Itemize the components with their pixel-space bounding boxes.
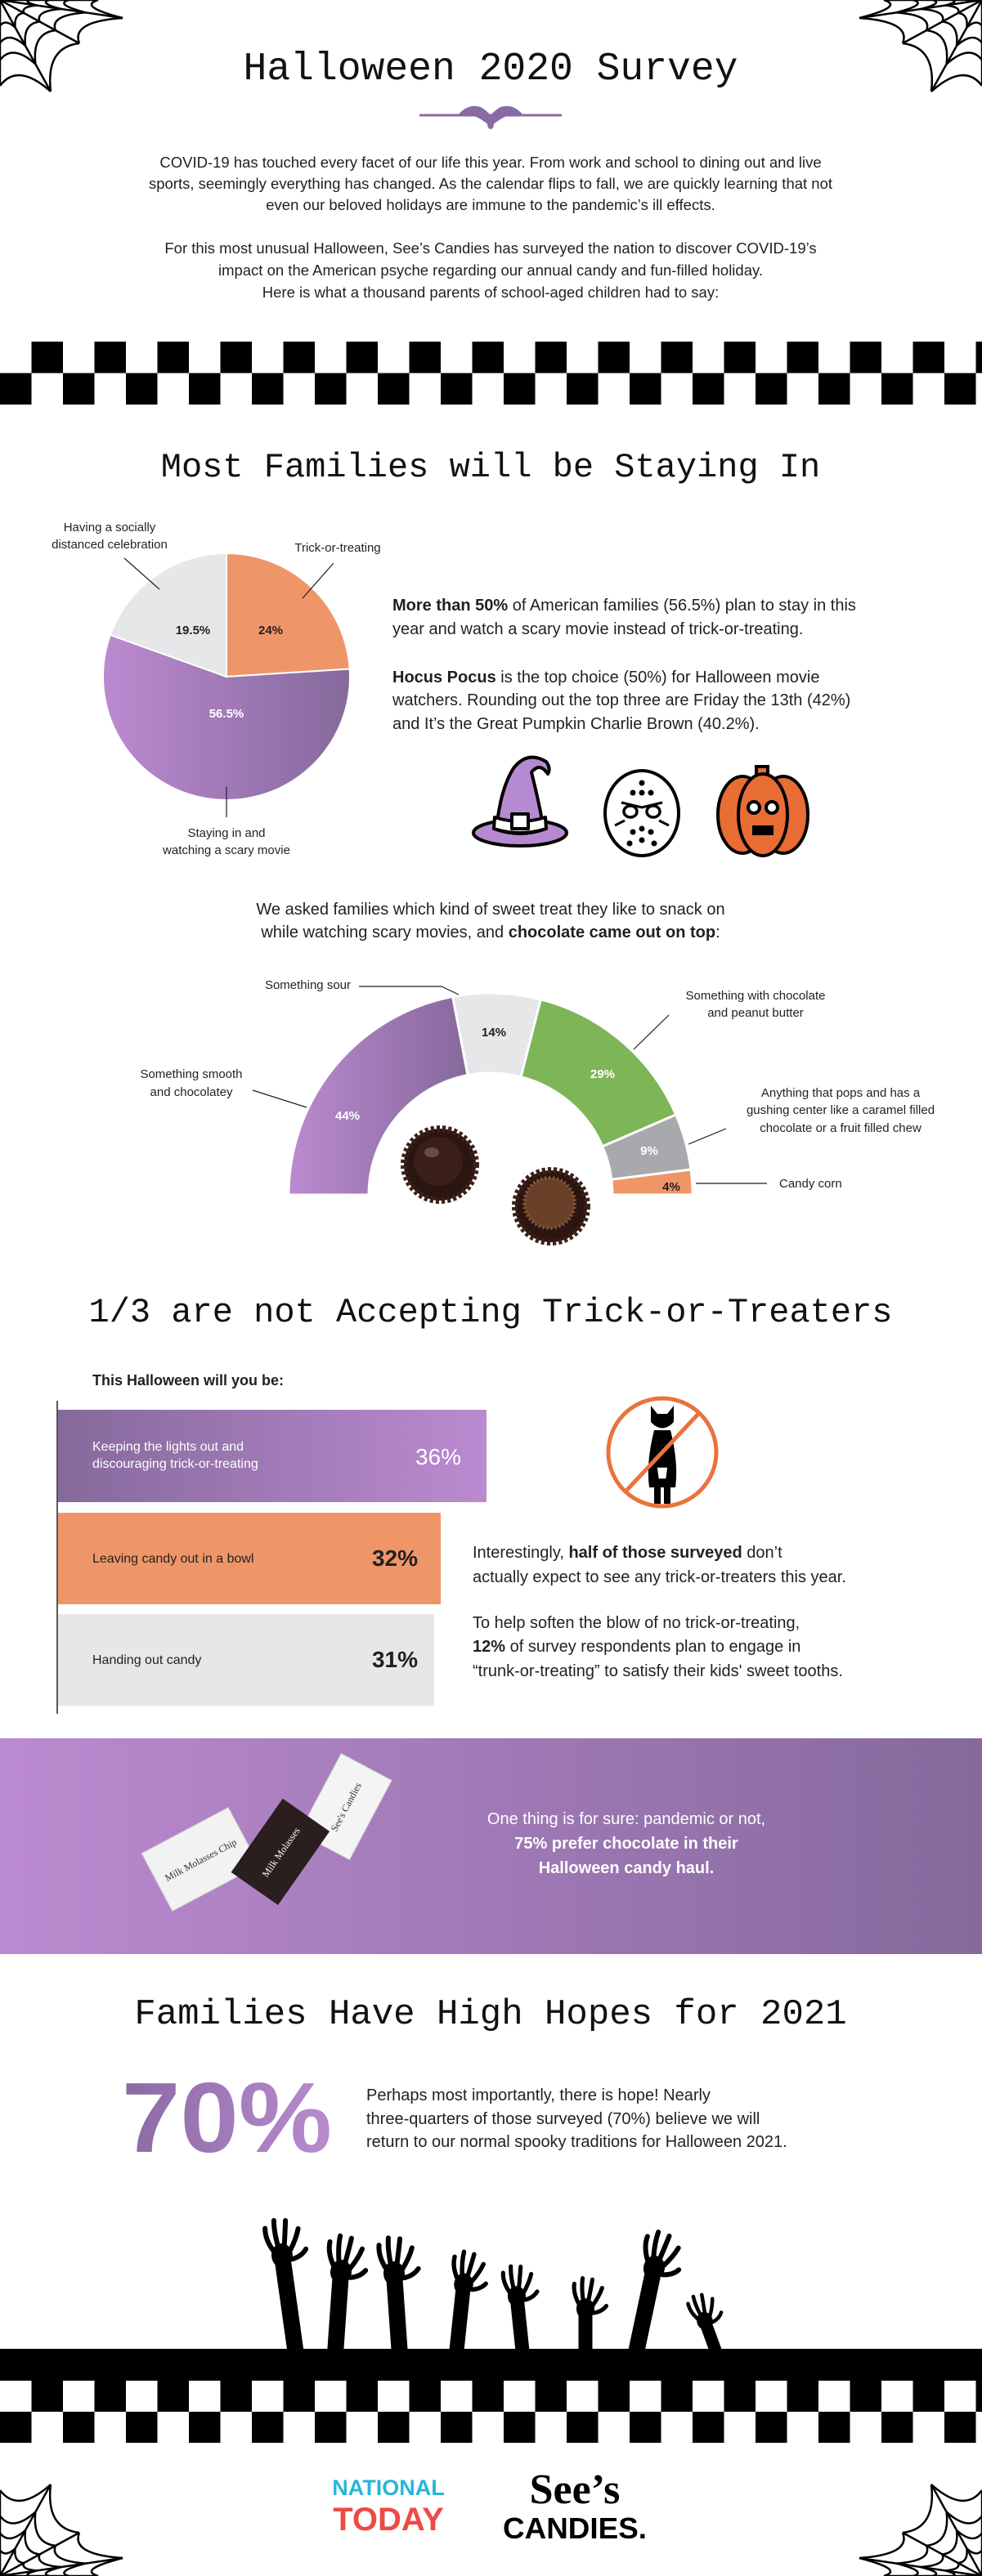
intro paragraph 2 [164, 239, 817, 301]
donut chart: sweet treats: Something sour [265, 978, 351, 992]
text: staying in stats: year and watch a scary movie instead of trick-or-treating. [392, 620, 803, 638]
banner: 75% prefer chocolate: One thing is for sure: pandemic or not, [487, 1810, 765, 1828]
pie chart: Having a socially [64, 521, 156, 534]
zombie hands [262, 2218, 723, 2349]
text: hope for 2021 [366, 2086, 787, 2151]
donut chart: sweet treats: Anything that pops and has a [761, 1086, 921, 1100]
bar: handing out 31%: Handing out candy [92, 1653, 201, 1667]
text: staying in stats: and It’s the Great Pumpkin Charlie Brown (40.2%). [392, 715, 760, 733]
text: trick-or-treat expectations [473, 1544, 846, 1680]
donut chart: sweet treats: 4% [662, 1180, 680, 1194]
bar: candy bowl 32%: Leaving candy out in a bowl [92, 1552, 253, 1566]
text: hope for 2021: three-quarters of those surveyed (70%) believe we will [366, 2110, 760, 2128]
intro paragraph 2: For this most unusual Halloween, See’s Candies has surveyed the nation to discover COVID-19’s [164, 239, 817, 257]
pie chart [52, 521, 381, 857]
pie chart: 56.5% [209, 707, 244, 721]
bar: candy bowl 32%: 32% [372, 1545, 418, 1571]
bar chart: this Halloween will you be [57, 1372, 487, 1714]
intro paragraph 1: even our beloved holidays are immune to the pandemic’s ill effects. [266, 196, 715, 213]
candy wrappers [141, 1754, 392, 1911]
text: trick-or-treat expectations: 12% of survey respondents plan to engage in [473, 1638, 800, 1656]
text: trick-or-treat expectations: “trunk-or-treating” to satisfy their kids' sweet tooths. [473, 1662, 843, 1680]
text: hope for 2021: Perhaps most importantly, there is hope! Nearly [366, 2086, 711, 2104]
cobweb top-left [0, 0, 123, 92]
text: sweet treat intro [256, 901, 725, 941]
bar: lights out 36%: Keeping the lights out and [92, 1440, 244, 1454]
text: staying in stats: Hocus Pocus is the top choice (50%) for Halloween movie [392, 669, 819, 686]
logo: National Today [332, 2475, 445, 2538]
heading: Families Have High Hopes for 2021: Families Have High Hopes for 2021 [134, 1994, 847, 2035]
pie chart: 19.5% [176, 624, 210, 637]
cobweb bottom-right [859, 2484, 982, 2576]
bar: handing out 31% [58, 1614, 434, 1706]
icon: witch hat [473, 758, 567, 846]
banner: 75% prefer chocolate [0, 1738, 982, 1954]
donut chart: sweet treats: and peanut butter [707, 1006, 804, 1020]
pie chart: Trick-or-treating [294, 541, 381, 555]
pie chart: Staying in and [187, 826, 266, 840]
intro paragraph 1 [149, 154, 832, 213]
intro paragraph 2: Here is what a thousand parents of school-aged children had to say: [262, 284, 719, 301]
cobweb top-right [859, 0, 982, 92]
donut chart: sweet treats: and chocolatey [150, 1085, 233, 1099]
candy wrappers: Milk Molasses Chip [163, 1836, 239, 1884]
pie chart: watching a scary movie [162, 843, 290, 857]
text: sweet treat intro: while watching scary movies, and chocolate came out on top: [260, 924, 720, 941]
heading: Most Families will be Staying In: Most Families will be Staying In [161, 448, 820, 487]
intro paragraph 1: sports, seemingly everything has changed. As the calendar flips to fall, we are quickly learning that not [149, 175, 832, 192]
donut chart: sweet treats: 14% [482, 1026, 506, 1040]
bar: handing out 31%: 31% [372, 1647, 418, 1672]
text: trick-or-treat expectations: actually expect to see any trick-or-treaters this year. [473, 1568, 846, 1586]
text: sweet treat intro: We asked families which kind of sweet treat they like to snack on [256, 901, 725, 919]
donut chart: sweet treats: 44% [335, 1109, 360, 1123]
candy wrappers: See's Candies [329, 1780, 364, 1833]
banner: 75% prefer chocolate: 75% prefer chocolate in their [514, 1835, 738, 1853]
ornament: bat divider [419, 106, 562, 129]
donut chart: sweet treats: Something with chocolate [686, 989, 825, 1003]
logo: See's Candies: See’s [530, 2466, 620, 2513]
black ground bar [0, 2349, 982, 2381]
donut chart: sweet treats: 9% [640, 1144, 658, 1158]
text: trick-or-treat expectations: To help soften the blow of no trick-or-treating, [473, 1614, 800, 1632]
pie chart: 24% [258, 624, 283, 637]
pie chart: distanced celebration [52, 538, 168, 552]
icon: no trick-or-treaters sign [608, 1398, 716, 1506]
logo: National Today: NATIONAL [332, 2475, 445, 2500]
banner: 75% prefer chocolate: Halloween candy haul. [539, 1859, 714, 1877]
bar: candy bowl 32% [58, 1513, 441, 1604]
text: staying in stats [392, 597, 856, 733]
bar: lights out 36%: 36% [415, 1444, 461, 1469]
donut chart: sweet treats: Something smooth [140, 1067, 243, 1081]
cobweb bottom-left [0, 2484, 123, 2576]
big stat 70%: 70% [122, 2062, 332, 2173]
text: staying in stats: watchers. Rounding out the top three are Friday the 13th (42%) [392, 691, 850, 709]
donut chart: sweet treats: 29% [590, 1067, 615, 1081]
intro paragraph 1: COVID-19 has touched every facet of our life this year. From work and school to dining out and live [159, 154, 822, 171]
title: Halloween 2020 Survey [244, 47, 738, 92]
icon: hockey mask [605, 771, 679, 856]
bar chart: this Halloween will you be: This Halloween will you be: [92, 1372, 284, 1389]
donut chart: sweet treats: Candy corn [779, 1177, 842, 1191]
bar: lights out 36% [58, 1410, 487, 1502]
logo: See's Candies [503, 2466, 647, 2545]
donut chart: sweet treats: gushing center like a caramel filled [747, 1103, 935, 1117]
checker band bottom [0, 2381, 982, 2443]
donut chart: sweet treats [140, 978, 935, 1195]
bar: lights out 36%: discouraging trick-or-treating [92, 1457, 258, 1471]
logo: National Today: TODAY [333, 2502, 444, 2538]
intro paragraph 2: impact on the American psyche regarding our annual candy and fun-filled holiday. [218, 262, 763, 279]
logo: See's Candies: CANDIES. [503, 2511, 647, 2545]
text: hope for 2021: return to our normal spooky traditions for Halloween 2021. [366, 2133, 787, 2151]
chocolate truffles [404, 1129, 587, 1242]
candy wrappers: Milk Molasses [260, 1825, 303, 1880]
donut chart: sweet treats: chocolate or a fruit filled chew [760, 1121, 921, 1135]
text: trick-or-treat expectations: Interestingly, half of those surveyed don’t [473, 1544, 782, 1562]
icon: pumpkin [718, 767, 808, 856]
checker band top [0, 342, 982, 405]
text: staying in stats: More than 50% of American families (56.5%) plan to stay in this [392, 597, 856, 615]
heading: 1/3 are not Accepting Trick-or-Treaters: 1/3 are not Accepting Trick-or-Treaters [89, 1293, 892, 1332]
